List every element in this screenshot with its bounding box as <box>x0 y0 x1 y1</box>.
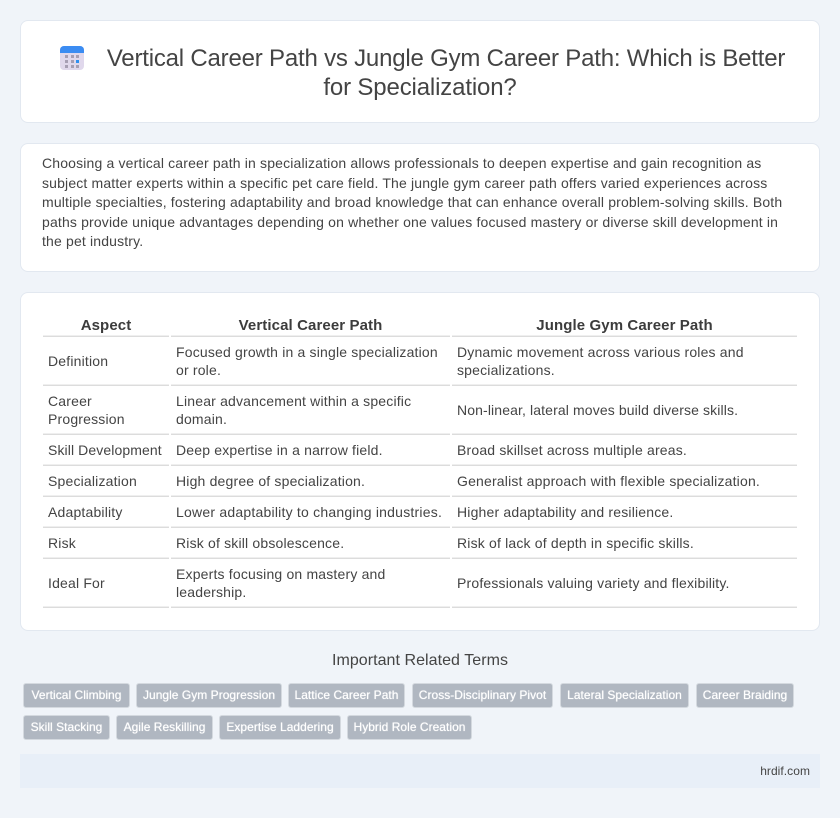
table header <box>81 317 713 334</box>
comparison table <box>43 317 797 608</box>
row: career progression: Progression <box>48 411 125 427</box>
intro text: subject matter experts within a specific pet care field. The jungle gym career path offers varied experiences across <box>42 175 767 191</box>
row: career progression <box>48 393 738 427</box>
tag: Lattice Career Path <box>295 688 398 702</box>
tag <box>347 715 472 740</box>
related terms tags <box>23 683 794 740</box>
intro text: multiple specialties, fostering adaptability and broad knowledge that can enhance overall problem-solving skills. Both <box>42 194 782 210</box>
related terms heading: Important Related Terms <box>332 652 508 669</box>
row: career progression: Career <box>48 393 92 409</box>
row: ideal for: Professionals valuing variety and flexibility. <box>457 575 730 591</box>
footer bar <box>20 754 820 788</box>
row: definition: or role. <box>176 362 221 378</box>
intro text: Choosing a vertical career path in specialization allows professionals to deepen expertise and gain recognition as <box>42 155 761 171</box>
tag <box>23 683 130 708</box>
row: skill development <box>48 442 687 458</box>
tag <box>23 715 110 740</box>
row: ideal for: leadership. <box>176 584 246 600</box>
row: adaptability: Adaptability <box>48 504 123 520</box>
table header: Jungle Gym Career Path <box>536 317 713 334</box>
row: ideal for <box>48 566 730 600</box>
intro text <box>42 155 782 249</box>
table header: Aspect <box>81 317 131 334</box>
row: skill development: Deep expertise in a narrow field. <box>176 442 383 458</box>
row: risk: Risk <box>48 535 76 551</box>
tag: Cross-Disciplinary Pivot <box>419 688 546 702</box>
row: adaptability: Lower adaptability to changing industries. <box>176 504 442 520</box>
row: ideal for: Experts focusing on mastery and <box>176 566 385 582</box>
icon: calendar <box>60 46 84 70</box>
intro text: paths provide unique advantages depending on whether one values focused mastery or diverse skill development in <box>42 214 778 230</box>
tag: Jungle Gym Progression <box>143 688 275 702</box>
row: specialization <box>48 473 760 489</box>
row: ideal for: Ideal For <box>48 575 105 591</box>
row: definition <box>48 344 744 378</box>
tag <box>560 683 689 708</box>
intro text: the pet industry. <box>42 233 143 249</box>
tag: Skill Stacking <box>31 720 102 734</box>
row: specialization: Generalist approach with flexible specialization. <box>457 473 760 489</box>
header card <box>20 20 820 123</box>
tag: Expertise Laddering <box>226 720 334 734</box>
row: specialization: High degree of specialization. <box>176 473 365 489</box>
table header: Vertical Career Path <box>239 317 382 334</box>
row: risk <box>48 535 694 551</box>
row: definition: specializations. <box>457 362 555 378</box>
tag: Agile Reskilling <box>124 720 205 734</box>
row: career progression: domain. <box>176 411 227 427</box>
row: risk: Risk of skill obsolescence. <box>176 535 344 551</box>
title: Vertical Career Path vs Jungle Gym Career Path: Which is Better <box>107 45 785 72</box>
footer source: hrdif.com <box>760 764 810 778</box>
tag <box>136 683 282 708</box>
row: definition: Dynamic movement across various roles and <box>457 344 744 360</box>
title: for Specialization? <box>323 74 517 100</box>
intro panel <box>20 143 820 272</box>
tag <box>412 683 553 708</box>
row: definition: Definition <box>48 353 108 369</box>
tag <box>288 683 405 708</box>
title <box>107 45 785 100</box>
row: career progression: Non-linear, lateral moves build diverse skills. <box>457 402 738 418</box>
row: adaptability <box>48 504 673 520</box>
tag <box>116 715 213 740</box>
row: skill development: Skill Development <box>48 442 162 458</box>
row: definition: Focused growth in a single specialization <box>176 344 438 360</box>
tag: Vertical Climbing <box>32 688 121 702</box>
row: career progression: Linear advancement within a specific <box>176 393 411 409</box>
row: risk: Risk of lack of depth in specific skills. <box>457 535 694 551</box>
tag: Career Braiding <box>703 688 787 702</box>
tag: Hybrid Role Creation <box>354 720 465 734</box>
row: adaptability: Higher adaptability and resilience. <box>457 504 673 520</box>
comparison table panel <box>20 292 820 631</box>
row: skill development: Broad skillset across multiple areas. <box>457 442 687 458</box>
row: specialization: Specialization <box>48 473 137 489</box>
tag <box>219 715 341 740</box>
tag <box>696 683 794 708</box>
tag: Lateral Specialization <box>567 688 682 702</box>
